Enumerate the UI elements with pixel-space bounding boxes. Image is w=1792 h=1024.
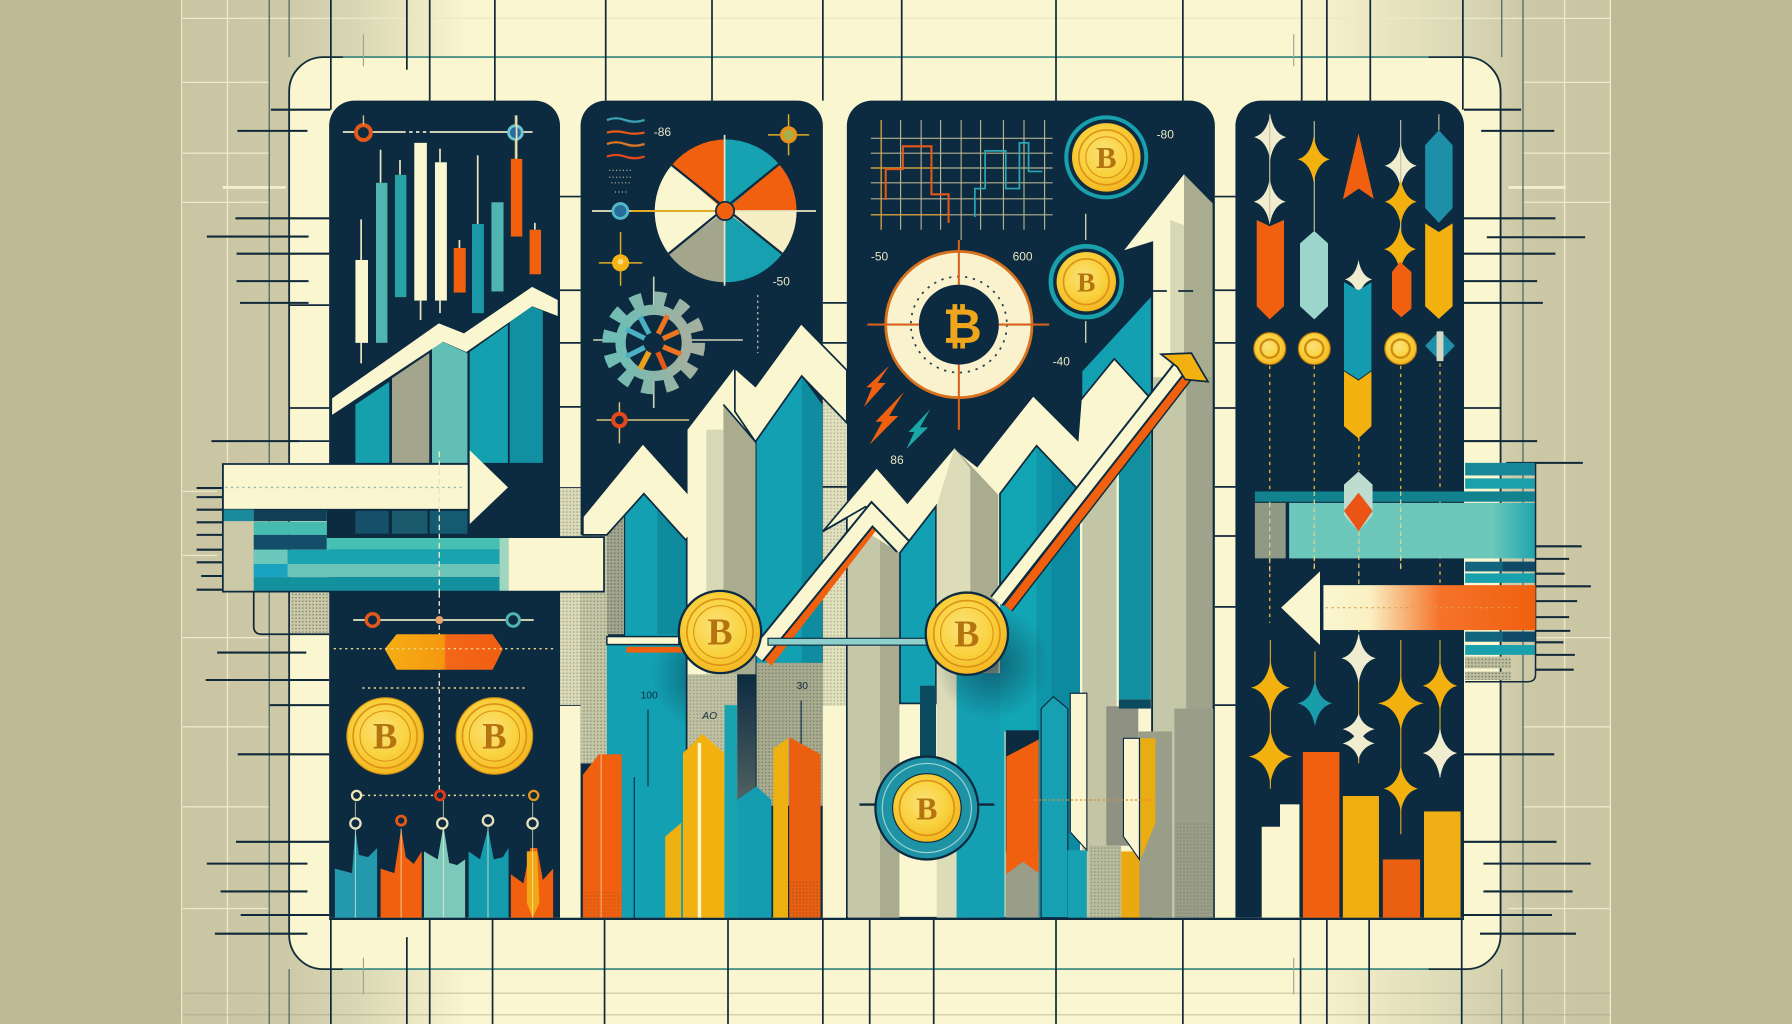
small coins <box>1254 330 1455 365</box>
yellow stars <box>1298 136 1417 272</box>
orange spearhead <box>1343 133 1374 199</box>
coin with teal ring <box>1051 246 1122 317</box>
coin <box>456 698 533 774</box>
lower gray column <box>634 663 823 918</box>
cream block <box>509 537 604 592</box>
horizontal arrow: cream right pointing <box>223 450 508 524</box>
teal rising triangle <box>1082 297 1151 457</box>
panel: main chart left columns <box>560 323 847 918</box>
teal arrow <box>1425 130 1453 223</box>
panel: navy backgrounds <box>329 101 1464 918</box>
teal column 1 <box>607 494 766 918</box>
cream and gray column <box>688 368 755 918</box>
value labels <box>871 250 1070 467</box>
value labels: 600 <box>1013 250 1033 264</box>
coin <box>347 698 423 774</box>
label: -86 <box>654 125 671 139</box>
gear <box>593 277 743 408</box>
crosshair: yellow left <box>599 232 642 286</box>
yellow arrow <box>1425 223 1453 319</box>
left tick marks <box>197 110 330 934</box>
pie chart <box>592 135 816 286</box>
panel: lower left coins <box>334 593 557 918</box>
crosshair: yellow top right <box>768 114 809 155</box>
halftone corner <box>254 592 329 634</box>
star row <box>1254 114 1439 299</box>
value labels: 86 <box>890 453 904 467</box>
coin: trend right: B <box>954 613 979 655</box>
small column labels: 30 <box>797 681 808 692</box>
tall chevron <box>735 323 847 442</box>
central arrow <box>1344 282 1371 438</box>
panel: candlestick chart <box>332 115 558 463</box>
crosshair: orange <box>597 402 689 443</box>
dashed guide lines <box>1270 363 1440 623</box>
coin with teal ring <box>1066 117 1146 197</box>
horizontal teal band <box>1255 463 1536 682</box>
left chevron <box>583 443 707 540</box>
indicator line <box>353 593 534 793</box>
arrowhead <box>1161 353 1208 382</box>
coin with teal ring: B <box>1077 267 1095 297</box>
right tick marks <box>1464 110 1591 934</box>
panel: main chart right columns <box>823 174 1213 918</box>
hexagon label <box>385 634 503 670</box>
light teal arrow <box>1300 231 1328 319</box>
panel: arrows and signal column <box>1249 114 1536 918</box>
candlesticks <box>355 115 541 363</box>
coin: B <box>373 716 397 757</box>
coin: trend left: B <box>707 612 733 654</box>
small column labels: AO <box>701 711 717 722</box>
label: -50 <box>773 275 790 289</box>
stipple gap columns <box>560 394 847 763</box>
big up arrow <box>1124 174 1213 918</box>
central diamond arrow <box>1344 472 1373 531</box>
coin: teal medallion <box>859 757 994 859</box>
rail <box>607 637 928 653</box>
mini legend <box>607 118 645 192</box>
large bitcoin target: ₿ <box>943 301 982 354</box>
coin: trend left <box>679 591 761 673</box>
grid chart <box>871 120 1053 240</box>
teal column 2 <box>757 377 822 709</box>
small orange arrow <box>1392 262 1411 317</box>
zigzag arrow <box>332 287 558 415</box>
lower stars <box>1249 633 1457 834</box>
small column labels: 100 <box>641 690 658 701</box>
lightning bolts <box>864 366 930 449</box>
coin: trend right <box>926 593 1008 675</box>
orange arrow <box>1257 220 1284 319</box>
value labels: -50 <box>871 250 889 264</box>
panel: top right market grid <box>864 117 1174 467</box>
foreground bars <box>1006 693 1155 918</box>
baseline <box>329 918 1464 920</box>
horizontal teal stripes <box>223 451 604 593</box>
trend bars <box>355 306 543 463</box>
panel: pie and gear <box>592 114 816 443</box>
large bitcoin target <box>867 240 1049 430</box>
coin with teal ring: B <box>1096 141 1117 175</box>
grid lines <box>269 0 1523 1024</box>
zigzag peaks <box>823 359 1152 918</box>
label: -80 <box>1157 127 1174 141</box>
lower bars <box>583 705 821 918</box>
coin: teal medallion: B <box>916 790 938 826</box>
small column labels <box>641 681 808 722</box>
arrow: rising orange and cream trend line <box>757 367 1189 663</box>
lower columns <box>848 407 1213 918</box>
gap column cream <box>823 705 847 918</box>
top indicator line <box>343 115 536 160</box>
cream frame <box>289 57 1501 969</box>
coin: B <box>482 716 507 757</box>
left pointing orange arrow <box>1281 571 1536 645</box>
bottom bar chart <box>1262 752 1461 918</box>
spike chart <box>335 791 553 918</box>
value labels: -40 <box>1053 355 1070 369</box>
